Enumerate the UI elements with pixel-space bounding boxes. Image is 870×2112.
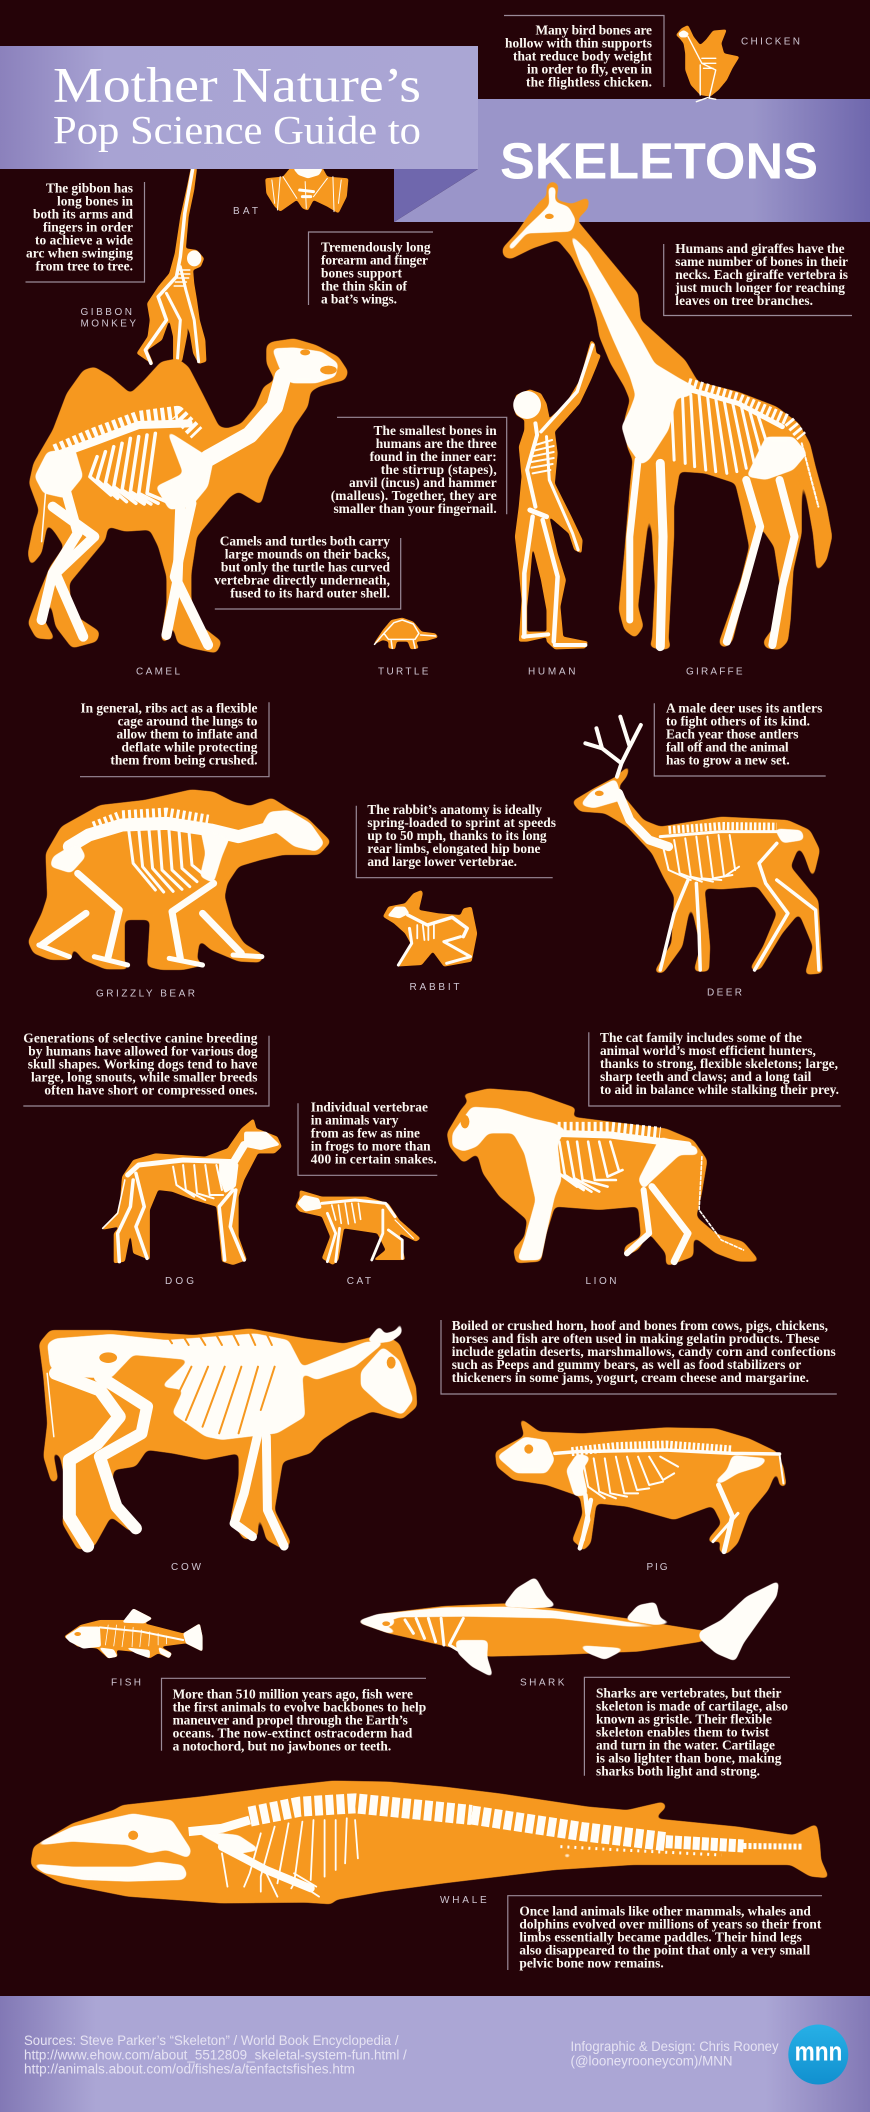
icon: lion skeleton — [447, 1088, 760, 1267]
logo: mnn: mnn — [795, 2036, 842, 2066]
callout: deer antlers: has to grow a new set. — [666, 752, 790, 767]
callout: gibbon — [26, 180, 144, 282]
icon: whale skeleton — [31, 1781, 830, 1904]
callout: dog skulls: large, long snouts, while smaller breeds — [31, 1069, 258, 1084]
callout: rabbit: up to 50 mph, thanks to its long — [367, 828, 547, 843]
banner: left title ribbon — [0, 46, 478, 169]
callout: ribs: allow them to inflate and — [116, 727, 258, 742]
callout: ribs: deflate while protecting — [122, 740, 258, 755]
callout: bat wings: forearm and finger — [321, 253, 428, 268]
label: rabbit: RABBIT — [410, 982, 460, 993]
icon: chicken skeleton — [676, 25, 740, 102]
callout: shark cartilage: Sharks are vertebrates, but their — [596, 1685, 781, 1700]
label: deer: DEER — [707, 988, 742, 999]
icon: giraffe skeleton — [502, 181, 832, 650]
label: cat: CAT — [347, 1276, 371, 1287]
callout: bat wings: Tremendously long — [321, 240, 431, 255]
callout: bat wings: bones support — [321, 266, 403, 281]
callout: shark cartilage: sharks both light and strong. — [596, 1763, 760, 1778]
icon: shark skeleton — [355, 1577, 780, 1678]
title: Pop Science Guide to — [53, 107, 421, 152]
label: dog: DOG — [165, 1276, 194, 1287]
callout: gelatin: such as Peeps and gummy bears, as well as food stabilizers or — [452, 1357, 801, 1372]
label: gibbon monkey: GIBBON — [80, 307, 132, 318]
label: gibbon monkey: MONKEY — [80, 319, 136, 330]
callout: whale limbs — [508, 1896, 822, 1970]
icon: bat skeleton — [265, 167, 348, 213]
callout: whale limbs: dolphins evolved over millions of years so their front — [519, 1916, 822, 1931]
callout: vertebrae — [298, 1099, 437, 1175]
callout: fish backbones: oceans. The now-extinct ostracoderm had — [173, 1725, 413, 1740]
callout: shark cartilage — [584, 1677, 790, 1778]
callout: dog skulls: often have short or compressed ones. — [44, 1082, 258, 1097]
callout: fish backbones: maneuver and propel through the Earth’s — [173, 1712, 408, 1727]
label: bat: BAT — [233, 206, 258, 217]
callout: gibbon: both its arms and — [33, 206, 134, 221]
sources text: http://www.ehow.com/about_5512809_skeletal-system-fun.html / — [24, 2047, 407, 2062]
callout: fish backbones: More than 510 million years ago, fish were — [173, 1686, 413, 1701]
logo: mnn — [788, 2024, 848, 2084]
callout: bird bones: hollow with thin supports — [505, 36, 652, 51]
callout: rabbit: and large lower vertebrae. — [367, 854, 517, 869]
callout: bat wings: a bat’s wings. — [321, 292, 397, 307]
callout: camels and turtles: Camels and turtles both carry — [220, 534, 390, 549]
callout: smallest bones: the stirrup (stapes), — [381, 462, 497, 477]
sources text: Sources: Steve Parker’s “Skeleton” / World Book Encyclopedia / — [24, 2033, 399, 2048]
callout: fish backbones: the first animals to evolve backbones to help — [173, 1699, 426, 1714]
callout: smallest bones: smaller than your fingernail. — [334, 501, 497, 516]
callout: gibbon: from tree to tree. — [36, 258, 133, 273]
label: shark: SHARK — [520, 1677, 565, 1688]
callout: dog skulls: by humans have allowed for various dog — [28, 1043, 258, 1058]
callout: bird bones: Many bird bones are — [536, 23, 652, 38]
callout: giraffe neck: necks. Each giraffe vertebra is — [675, 267, 848, 282]
callout: dog skulls: Generations of selective canine breeding — [23, 1030, 258, 1045]
footer band — [0, 1996, 870, 2112]
callout: gelatin: horses and fish are often used in making gelatin products. These — [452, 1331, 820, 1346]
callout: bat wings — [308, 232, 433, 307]
icon: gibbon monkey skeleton — [136, 165, 206, 366]
icon: cat skeleton — [295, 1190, 421, 1265]
label: human: HUMAN — [528, 666, 576, 677]
callout: deer antlers: fall off and the animal — [666, 739, 789, 754]
callout: vertebrae: in frogs to more than — [311, 1138, 431, 1153]
label: pig: PIG — [646, 1562, 668, 1573]
callout: shark cartilage: known as gristle. Their flexible — [596, 1711, 772, 1726]
label: cow: COW — [171, 1562, 202, 1573]
callout: gibbon: arc when swinging — [26, 245, 133, 260]
callout: gibbon: to achieve a wide — [35, 232, 133, 247]
label: whale: WHALE — [440, 1895, 487, 1906]
label: lion: LION — [586, 1276, 616, 1287]
callout: ribs: In general, ribs act as a flexible — [80, 701, 258, 716]
callout: cat family: thanks to strong, flexible skeletons; large, — [600, 1056, 838, 1071]
callout: ribs: cage around the lungs to — [118, 714, 258, 729]
label: chicken: CHICKEN — [741, 36, 800, 47]
callout: camels and turtles: large mounds on their backs, — [225, 547, 390, 562]
callout: fish backbones: a notochord, but no jawbones or teeth. — [173, 1738, 391, 1753]
callout: gelatin: thickeners in some jams, yogurt, cream cheese and margarine. — [452, 1370, 809, 1385]
callout: dog skulls — [23, 1030, 269, 1106]
callout: bird bones — [504, 16, 664, 90]
callout: smallest bones: humans are the three — [376, 436, 497, 451]
icon: dog skeleton — [101, 1118, 282, 1265]
callout: giraffe neck: same number of bones in their — [675, 254, 848, 269]
icon: pig skeleton — [495, 1417, 787, 1554]
icon: camel skeleton — [28, 338, 348, 653]
callout: whale limbs: pelvic bone now remains. — [519, 1955, 664, 1970]
callout: deer antlers: to fight others of its kind. — [666, 713, 810, 728]
callout: dog skulls: skull shapes. Working dogs tend to have — [28, 1056, 258, 1071]
callout: whale limbs: also disappeared to the point that only a very small — [519, 1942, 810, 1957]
label: grizzly bear: GRIZZLY BEAR — [96, 989, 195, 1000]
callout: smallest bones: found in the inner ear: — [370, 449, 497, 464]
design credit — [570, 2039, 779, 2068]
callout: vertebrae: Individual vertebrae — [311, 1099, 428, 1114]
callout: rabbit: The rabbit’s anatomy is ideally — [367, 802, 542, 817]
callout: gelatin — [441, 1318, 837, 1394]
banner: ribbon lower part — [394, 169, 478, 222]
heading: skeletons: SKELETONS — [500, 132, 818, 190]
title — [53, 57, 421, 152]
label: camel: CAMEL — [136, 666, 180, 677]
callout: shark cartilage: skeleton is made of cartilage, also — [596, 1698, 788, 1713]
design credit: (@looneyrooneycom)/MNN — [570, 2053, 732, 2068]
callout: camels and turtles: vertebrae directly underneath, — [214, 573, 390, 588]
callout: gibbon: The gibbon has — [46, 180, 133, 195]
icon: turtle skeleton — [373, 618, 438, 649]
callout: cat family — [589, 1030, 841, 1106]
callout: shark cartilage: skeleton enables them to twist — [596, 1724, 770, 1739]
callout: bird bones: that reduce body weight — [513, 49, 653, 64]
label: turtle: TURTLE — [378, 666, 429, 677]
title: Mother Nature’s — [53, 57, 421, 113]
label: giraffe: GIRAFFE — [686, 666, 743, 677]
callout: giraffe neck: Humans and giraffes have the — [675, 241, 845, 256]
callout: smallest bones: The smallest bones in — [374, 423, 497, 438]
callout: smallest bones: (malleus). Together, they are — [331, 488, 497, 503]
callout: cat family: The cat family includes some of the — [600, 1030, 802, 1045]
callout: smallest bones: anvil (incus) and hammer — [349, 475, 497, 490]
callout: deer antlers: A male deer uses its antlers — [666, 700, 822, 715]
icon: human skeleton — [513, 340, 601, 649]
callout: whale limbs: limbs essentially became paddles. Their hind legs — [519, 1929, 802, 1944]
callout: giraffe neck: leaves on tree branches. — [675, 293, 813, 308]
callout: rabbit: spring-loaded to sprint at speeds — [367, 815, 556, 830]
sources text — [24, 2033, 407, 2076]
callout: vertebrae: from as few as nine — [311, 1125, 420, 1140]
callout: smallest bones — [331, 417, 507, 516]
callout: vertebrae: in animals vary — [311, 1112, 399, 1127]
callout: bird bones: in order to fly, even in — [527, 62, 653, 77]
callout: gelatin: include gelatin deserts, marshmallows, candy corn and confections — [452, 1344, 836, 1359]
callout: gibbon: fingers in order — [43, 219, 133, 234]
callout: vertebrae: 400 in certain snakes. — [311, 1151, 437, 1166]
callout: ribs: them from being crushed. — [110, 753, 258, 768]
label: fish: FISH — [111, 1677, 141, 1688]
callout: deer antlers — [654, 700, 826, 776]
callout: fish backbones — [162, 1678, 426, 1753]
label: gibbon monkey — [80, 307, 136, 330]
banner: right skeletons ribbon — [478, 99, 870, 222]
callout: giraffe neck: just much longer for reaching — [674, 280, 845, 295]
callout: giraffe neck — [664, 241, 852, 316]
callout: deer antlers: Each year those antlers — [666, 726, 798, 741]
design credit: Infographic & Design: Chris Rooney — [570, 2039, 779, 2054]
callout: cat family: animal world’s most efficient hunters, — [600, 1043, 816, 1058]
icon: rabbit skeleton — [383, 890, 477, 967]
callout: bat wings: the thin skin of — [321, 279, 408, 294]
icon: deer skeleton — [571, 717, 823, 975]
callout: rabbit — [356, 802, 556, 878]
callout: ribs — [80, 701, 269, 777]
callout: whale limbs: Once land animals like other mammals, whales and — [519, 1903, 811, 1918]
icon: grizzly bear skeleton — [28, 789, 331, 970]
banner: ribbon fold — [394, 169, 478, 222]
icon: fish skeleton — [64, 1608, 203, 1658]
sources text: http://animals.about.com/od/fishes/a/tenfactsfishes.htm — [24, 2061, 355, 2076]
callout: gibbon: long bones in — [57, 193, 134, 208]
icon: cow skeleton — [39, 1317, 417, 1550]
callout: shark cartilage: and turn in the water. Cartilage — [596, 1737, 775, 1752]
callout: gelatin: Boiled or crushed horn, hoof and bones from cows, pigs, chickens, — [452, 1318, 828, 1333]
callout: bird bones: the flightless chicken. — [526, 75, 652, 90]
callout: rabbit: rear limbs, elongated hip bone — [367, 841, 541, 856]
callout: camels and turtles: but only the turtle has curved — [221, 560, 391, 575]
callout: shark cartilage: is also lighter than bone, making — [596, 1750, 782, 1765]
callout: cat family: to aid in balance while stalking their prey. — [600, 1082, 839, 1097]
callout: camels and turtles — [214, 534, 401, 609]
callout: cat family: sharp teeth and claws; and a long tail — [600, 1069, 812, 1084]
callout: camels and turtles: fused to its hard outer shell. — [230, 586, 390, 601]
